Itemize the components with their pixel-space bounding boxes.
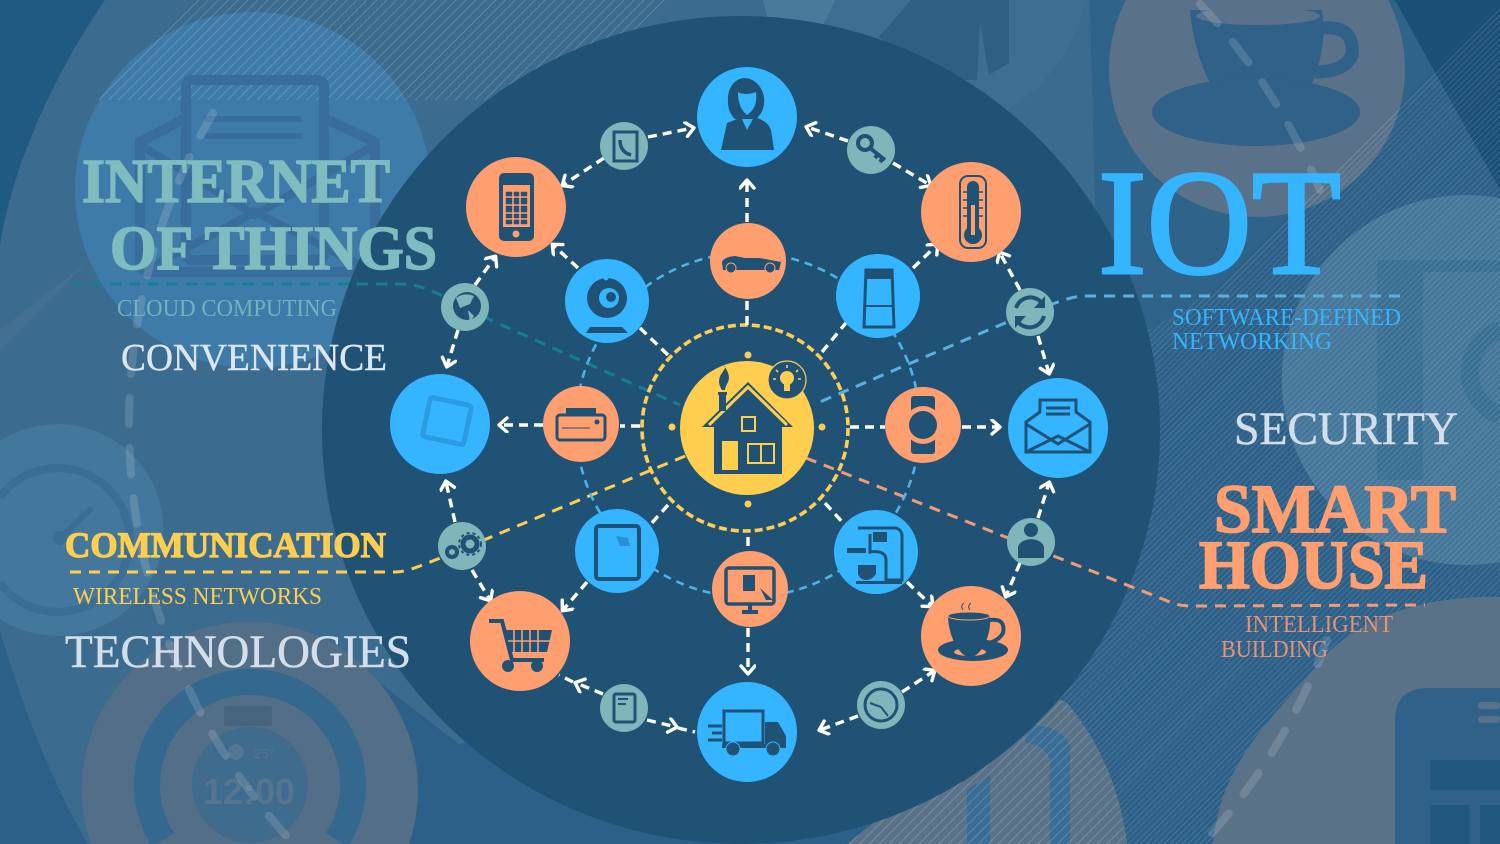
- node: tablet: [575, 509, 659, 593]
- label: intelligent building: BUILDING: [1221, 637, 1328, 663]
- center: smart house: [680, 361, 814, 495]
- node: key: [847, 126, 895, 174]
- blue dashed ring: [576, 253, 920, 597]
- connector: communication: [70, 454, 690, 572]
- title: smart house: [1199, 471, 1456, 603]
- node: clock: [857, 681, 905, 729]
- node: clipboard: [600, 684, 648, 732]
- node: phonebook: [600, 122, 648, 170]
- node: envelope: [1008, 378, 1108, 478]
- node: businessman: [1007, 518, 1055, 566]
- connector: IoT: [815, 296, 1400, 404]
- node: shopping cart: [470, 591, 570, 691]
- node: thermometer: [921, 162, 1021, 262]
- title: internet of things: INTERNET: [82, 148, 390, 216]
- node: refrigerator: [836, 254, 920, 338]
- label: convenience: CONVENIENCE: [121, 337, 387, 379]
- label: intelligent building: INTELLIGENT: [1245, 612, 1393, 638]
- title: smart house: HOUSE: [1199, 527, 1428, 603]
- arrows: radial spokes: [500, 181, 999, 673]
- node: woman: [697, 67, 797, 167]
- label: software-defined networking: SOFTWARE-DEFINED: [1172, 305, 1401, 331]
- title: internet of things: OF THINGS: [110, 215, 437, 283]
- background: smartwatch circle: 25°: [254, 746, 274, 761]
- background: envelope circle: [75, 0, 665, 368]
- node: truck: [697, 682, 797, 782]
- label: wireless networks: WIRELESS NETWORKS: [73, 584, 322, 610]
- background: dashed ring: [129, 4, 1327, 840]
- background: cup circle: [1109, 0, 1405, 217]
- arrows: outer ring: [446, 127, 1049, 732]
- node: coffee machine: [834, 510, 918, 594]
- label: software-defined networking: [1172, 305, 1401, 355]
- yellow dashed ring: [642, 325, 848, 531]
- label: communication: COMMUNICATION: [65, 525, 386, 565]
- label: technologies: TECHNOLOGIES: [65, 626, 411, 678]
- title: internet of things: [82, 148, 437, 283]
- background: clock circle: [0, 424, 164, 636]
- label: software-defined networking: NETWORKING: [1172, 329, 1332, 355]
- background: smartwatch circle: 12:00: [203, 771, 295, 812]
- title: smart house: SMART: [1214, 471, 1456, 547]
- connector: internet of things: [72, 284, 680, 405]
- node: webcam: [565, 259, 649, 343]
- background: hatched right region: [847, 5, 1500, 844]
- label: cloud computing: CLOUD COMPUTING: [117, 296, 337, 322]
- background: smartwatch circle: [82, 622, 418, 844]
- node: printer: [543, 386, 619, 462]
- node: car: [710, 223, 786, 299]
- label: security: SECURITY: [1234, 403, 1458, 455]
- node: sync: [1006, 288, 1054, 336]
- node: gears: [438, 522, 486, 570]
- central dark disc: [322, 16, 1160, 844]
- node: smartphone: [466, 157, 566, 257]
- node: globe: [441, 283, 489, 331]
- title: IoT: IOT: [1098, 140, 1341, 306]
- node: monitor: [712, 551, 788, 627]
- icon: idea bulb: [768, 361, 806, 399]
- node: chip: [390, 374, 490, 474]
- node: coffee cup: [921, 586, 1021, 686]
- node: smartwatch: [885, 387, 961, 463]
- label: intelligent building: [1221, 612, 1393, 663]
- connector: smart house: [806, 458, 1425, 606]
